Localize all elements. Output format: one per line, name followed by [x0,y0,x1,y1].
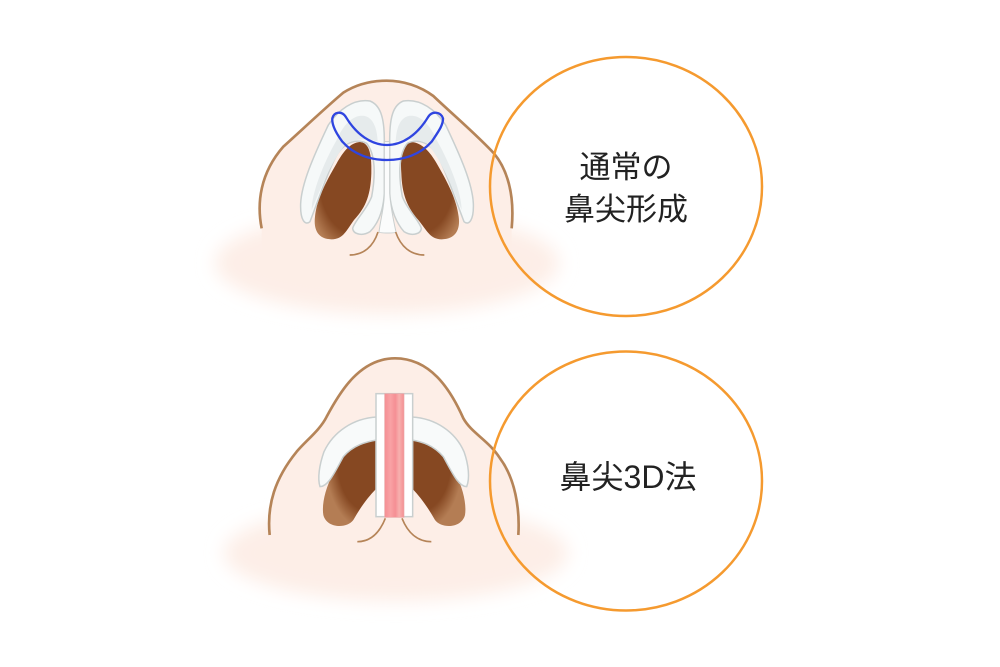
cartilage shading: right [396,116,462,210]
left nostril: bottom [323,440,377,526]
right columella line: bottom [402,518,431,542]
callout circle: normal tip plasty [490,57,762,316]
right columella line: top [396,232,424,255]
right alar cartilage: top [390,101,473,234]
label: 鼻尖形成: 鼻尖形成 [564,192,688,227]
bottom nose illustration [224,358,568,601]
label: 鼻尖3D法: 鼻尖3D法 [560,459,696,495]
septal extension graft [376,394,413,517]
cartilage shading: left [312,116,378,210]
right alar cartilage: bottom [412,417,469,487]
nose outline: top [260,81,512,260]
left alar cartilage: bottom [319,417,377,487]
septal cartilage: top [379,142,396,233]
label: 通常の: 通常の [580,150,672,185]
skin shadow: top [215,212,559,314]
top nose illustration [215,81,559,314]
left columella line: top [350,232,378,255]
nose contour line: top [260,81,512,228]
blue shield graft: top [332,113,443,160]
left nostril: top [315,142,371,239]
skin shadow: bottom [224,505,568,601]
right nostril: top [401,142,459,239]
left columella line: bottom [357,518,385,542]
callout circle: 3D tip method [490,352,762,610]
left alar cartilage: top [301,101,384,234]
right nostril: bottom [412,440,465,526]
nose outline: bottom [269,358,519,562]
nose contour line: bottom [269,358,519,535]
